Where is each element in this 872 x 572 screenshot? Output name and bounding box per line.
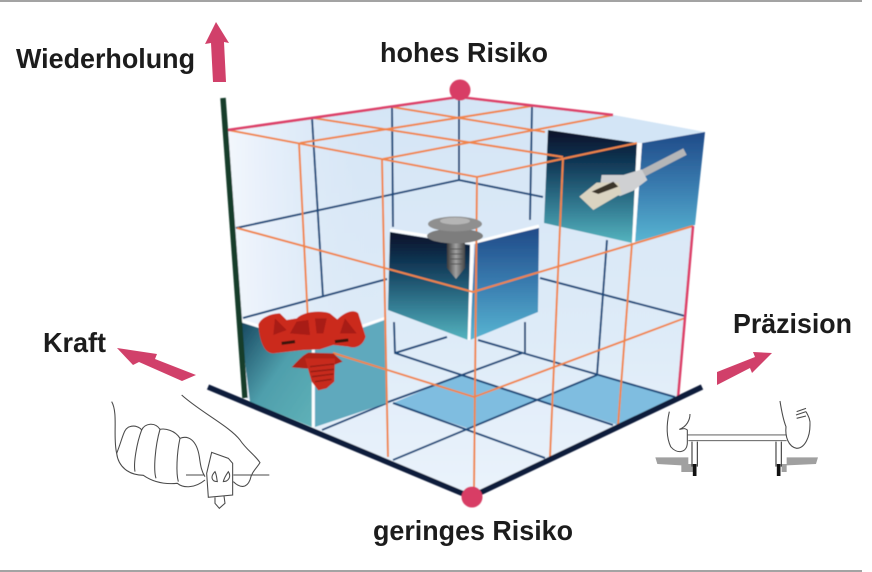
bottom rule — [0, 570, 862, 572]
dot: low risk — [462, 486, 482, 508]
axes — [208, 98, 702, 497]
fastener pin left — [689, 464, 700, 476]
drawing: fingers pressing fastener (precision) — [655, 401, 818, 476]
label: Wiederholung: Wiederholung — [16, 43, 195, 74]
dot: high risk — [450, 80, 470, 100]
shaded floor cells — [393, 375, 675, 428]
drawing: hand pinching clip (force) — [112, 395, 269, 508]
box: upper right — [544, 115, 705, 243]
arrow: Wiederholung up — [205, 22, 229, 82]
part: grey push rivet — [427, 216, 483, 279]
top rule — [0, 0, 862, 2]
part: red clip — [258, 311, 366, 390]
box: center — [388, 226, 539, 340]
orange grid lines — [228, 106, 693, 490]
arrow: Kraft left — [117, 348, 196, 381]
arrow: Präzision right — [717, 352, 772, 385]
fastener pin right — [773, 464, 784, 476]
hatched ledge right — [782, 457, 818, 472]
label: Kraft: Kraft — [43, 327, 106, 358]
label: Präzision: Präzision — [733, 308, 852, 339]
part: network connector — [579, 152, 685, 210]
hatched ledge left — [655, 457, 693, 472]
cube walls — [228, 97, 705, 497]
pink cube edges — [228, 97, 693, 397]
label: hohes Risiko: hohes Risiko — [380, 37, 548, 68]
box: lower left — [240, 318, 387, 427]
risk cube — [208, 80, 705, 508]
label: geringes Risiko: geringes Risiko — [373, 515, 573, 546]
blue grid lines — [236, 97, 685, 460]
